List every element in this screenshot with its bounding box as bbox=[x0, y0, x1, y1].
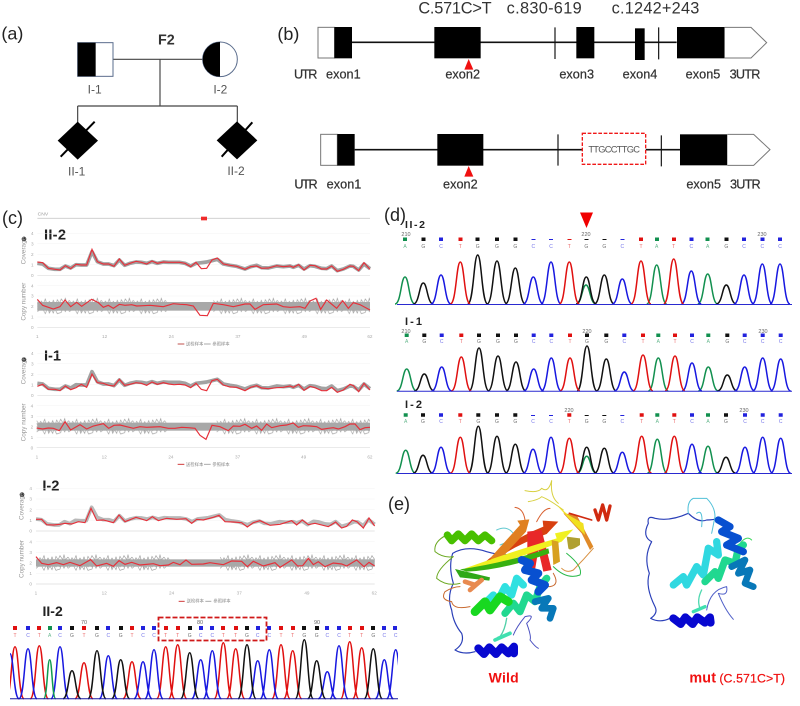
CNV track header bbox=[37, 211, 370, 220]
copy number trace II-2 bbox=[37, 296, 370, 316]
coverage axis I-1 bbox=[20, 351, 34, 398]
CNV chart: rest of I-1 and I-2: 24 bbox=[169, 590, 175, 595]
coverage axis I-1: 1 bbox=[31, 382, 34, 387]
mutant gene model bbox=[321, 133, 770, 177]
labels of pedigree members: II-1 bbox=[68, 165, 86, 179]
coverage axis I-2: Coverage bbox=[18, 492, 25, 520]
trace I-2: 220 bbox=[564, 408, 574, 414]
wild-type gene labels: 3UTR bbox=[730, 67, 760, 81]
wild-type gene labels: exon1 bbox=[326, 67, 361, 81]
base call letters: A bbox=[48, 633, 52, 639]
copy number axis I-1: 1 bbox=[31, 435, 34, 440]
copy number axis I-1: 3 bbox=[31, 414, 34, 419]
copy number axis I-1: 4 bbox=[31, 403, 34, 408]
legend I-2 bbox=[179, 598, 231, 605]
symbol: father I-1 carrier bbox=[78, 43, 113, 76]
mutant gene labels: 3UTR bbox=[730, 177, 761, 191]
label I-2: I-2 bbox=[42, 478, 59, 494]
trace II-2: II-2 bbox=[405, 219, 425, 231]
coverage trace I-1 bbox=[37, 372, 370, 392]
label II-2: II-2 bbox=[44, 227, 66, 243]
trace I-2: I-2 bbox=[405, 399, 422, 411]
coverage axis II-2: 1 bbox=[31, 262, 34, 267]
legend II-2: 参照样本 bbox=[212, 341, 230, 348]
mutant protein model bbox=[646, 498, 753, 624]
symbol: affected II-2 bbox=[217, 121, 257, 159]
copy number axis I-2 bbox=[18, 539, 32, 587]
copy number axis I-2: 0 bbox=[29, 582, 32, 587]
mutant gene labels: exon1 bbox=[327, 177, 361, 191]
position numbers: 70 bbox=[81, 620, 87, 626]
copy number axis II-2 bbox=[20, 283, 34, 330]
copy number axis I-2: 4 bbox=[29, 539, 32, 544]
position numbers: 90 bbox=[314, 620, 320, 626]
panel label d: (d) bbox=[384, 205, 406, 225]
CNV chart: rest of I-1 and I-2: 37 bbox=[235, 455, 241, 460]
CNV chart: II-2 and start of I-1: 62 bbox=[367, 334, 373, 339]
legend I-2: 送检样本 bbox=[187, 598, 205, 605]
CNV chart: rest of I-1 and I-2 bbox=[18, 403, 377, 605]
label II-2 sequence: II-2 bbox=[42, 603, 63, 619]
copy number trace I-1 bbox=[37, 417, 370, 439]
panel c bottom: Sanger trace showing insertion bbox=[0, 603, 418, 706]
coverage axis II-2: 4 bbox=[31, 231, 34, 236]
CNV chart: II-2 and start of I-1: 49 bbox=[302, 334, 307, 339]
CNV chart: rest of I-1 and I-2: 12 bbox=[102, 455, 107, 460]
CNV chart: rest of I-1 and I-2: 24 bbox=[168, 455, 174, 460]
CNV chart: II-2 and start of I-1: 37 bbox=[235, 334, 241, 339]
trace I-1 bbox=[397, 316, 792, 391]
mutant gene labels: UTR bbox=[294, 177, 318, 191]
beta sheet strands bbox=[482, 521, 558, 567]
wild-type gene labels: UTR bbox=[294, 67, 317, 81]
CNV chart: rest of I-1 and I-2: 49 bbox=[304, 590, 310, 595]
copy number axis II-2: Copy number bbox=[20, 283, 27, 321]
copy number axis I-2: 1 bbox=[29, 571, 32, 576]
coverage axis I-2: 2 bbox=[29, 507, 32, 512]
panel label b: (b) bbox=[277, 24, 299, 44]
coverage axis I-1: 0 bbox=[31, 393, 34, 398]
mutation arrowhead bbox=[580, 212, 593, 228]
mutant gene labels: exon5 bbox=[686, 177, 721, 191]
wild-type gene labels: exon2 bbox=[445, 67, 480, 81]
label Wild: Wild bbox=[489, 669, 519, 685]
copy number axis I-2: Copy number bbox=[18, 540, 25, 578]
coverage axis II-2: Coverage bbox=[20, 236, 27, 264]
coverage axis I-1: 4 bbox=[31, 351, 34, 356]
base call letters: CCCCCCCCCCCCC bbox=[26, 633, 398, 639]
wild-type gene labels: exon4 bbox=[623, 67, 657, 81]
coverage axis II-2: 2 bbox=[31, 252, 34, 257]
copy number axis II-2: 1 bbox=[31, 315, 34, 320]
coverage axis I-2: 1 bbox=[29, 518, 32, 523]
labels of pedigree members: I-1 bbox=[88, 82, 102, 96]
position numbers bbox=[81, 620, 320, 626]
panel label a: (a) bbox=[1, 23, 23, 43]
symbol: mother I-2 carrier bbox=[203, 42, 237, 77]
trace I-1: AAA bbox=[405, 339, 711, 345]
CNV chart: rest of I-1 and I-2: 62 bbox=[372, 590, 377, 595]
trace I-2 bbox=[396, 399, 792, 474]
coverage axis I-2 bbox=[18, 486, 32, 534]
coverage axis I-1: 2 bbox=[31, 372, 34, 377]
trace I-2: 230 bbox=[739, 408, 749, 414]
label mut (C.571C>T) bbox=[689, 670, 785, 686]
wild-type gene model bbox=[318, 27, 767, 70]
mutant gene labels: exon2 bbox=[443, 177, 478, 191]
CNV chart: II-2 and start of I-1: 24 bbox=[169, 334, 174, 339]
trace I-1: GGGGGGG bbox=[422, 339, 729, 345]
symbol: affected II-1 bbox=[58, 122, 98, 160]
copy number axis I-2: 2 bbox=[29, 561, 32, 566]
family label F2: F2 bbox=[158, 32, 175, 48]
trace I-1: 230 bbox=[758, 329, 768, 335]
copy number axis II-2: 3 bbox=[31, 294, 34, 299]
trace I-2: TTTT bbox=[459, 419, 676, 425]
wild-type gene labels: exon3 bbox=[559, 67, 594, 81]
legend I-1 bbox=[178, 461, 230, 468]
labels of pedigree members: II-2 bbox=[227, 164, 245, 178]
coverage axis I-2: 3 bbox=[29, 497, 32, 502]
CNV chart: rest of I-1 and I-2: 62 bbox=[367, 455, 373, 460]
panel a: pedigree bbox=[1, 23, 257, 179]
trace I-1: 210 bbox=[401, 329, 411, 335]
CNV chart: rest of I-1 and I-2: 49 bbox=[301, 455, 307, 460]
trace I-1: TTTT bbox=[460, 339, 677, 345]
chromatogram peaks bbox=[0, 635, 418, 706]
trace I-1: I-1 bbox=[405, 316, 422, 328]
copy number axis II-2: 4 bbox=[31, 283, 34, 288]
panel b: gene structure bbox=[277, 0, 770, 191]
trace I-1: 220 bbox=[582, 329, 592, 335]
base call letters: TTTTTTTTTTTT bbox=[13, 633, 363, 639]
copy number axis I-1: 2 bbox=[31, 424, 34, 429]
trace I-1: CCCCCCCC bbox=[440, 339, 783, 345]
trace II-2: 230 bbox=[757, 232, 767, 238]
trace I-2: AAA bbox=[404, 419, 710, 425]
helices bbox=[569, 513, 592, 520]
trace II-2: TTTT bbox=[459, 244, 675, 250]
coverage trace II-2 bbox=[37, 249, 370, 271]
labels of pedigree members: I-2 bbox=[213, 82, 228, 96]
copy number axis I-1 bbox=[20, 403, 34, 450]
CNV chart: II-2 and start of I-1: 12 bbox=[102, 334, 108, 339]
legend I-1: 送检样本 bbox=[186, 461, 204, 468]
legend I-1: 参照样本 bbox=[212, 461, 230, 468]
trace I-2: CCCCCCCC bbox=[439, 419, 783, 425]
trace II-2 bbox=[395, 219, 792, 304]
legend II-2: 送检样本 bbox=[186, 341, 204, 348]
trace II-2: AAA bbox=[403, 244, 710, 250]
coverage axis I-2: 4 bbox=[29, 486, 32, 491]
x axis ticks I-1: 1 bbox=[36, 455, 39, 460]
copy number trace I-2 bbox=[36, 553, 375, 573]
coverage axis II-2: 3 bbox=[31, 241, 34, 246]
panel label e: (e) bbox=[388, 494, 410, 514]
trace II-2: CCCCCCCC bbox=[439, 244, 782, 250]
base call markers bbox=[13, 626, 397, 630]
coverage axis I-1: 3 bbox=[31, 361, 34, 366]
CNV chart: rest of I-1 and I-2: 37 bbox=[237, 590, 242, 595]
trace II-2: GGGGGGG bbox=[421, 244, 728, 250]
trace II-2: 220 bbox=[581, 232, 591, 238]
wild-type gene labels bbox=[294, 67, 760, 81]
copy number axis I-2: 3 bbox=[29, 550, 32, 555]
panel label c: (c) bbox=[2, 208, 23, 228]
coverage axis II-2: 0 bbox=[31, 273, 34, 278]
label I-1: I-1 bbox=[44, 349, 61, 365]
trace II-2: 210 bbox=[401, 232, 411, 238]
copy number axis I-1: Copy number bbox=[20, 403, 27, 441]
CNV chart: II-2 and start of I-1 bbox=[20, 211, 373, 398]
x axis ticks I-2: 1 bbox=[35, 590, 38, 595]
label mut (C.571C>T): (C.571C>T) bbox=[719, 671, 785, 685]
trace I-2: GGGGGGG bbox=[421, 419, 728, 425]
coverage axis I-2: 0 bbox=[29, 529, 32, 534]
labels of pedigree members bbox=[68, 82, 245, 179]
dashed red box over inserted bases bbox=[158, 618, 266, 640]
panel d: Sanger traces for family bbox=[384, 205, 792, 474]
x axis ticks II-2: 1 bbox=[36, 334, 39, 339]
panel c: CNV plots bbox=[2, 208, 377, 605]
wild-type protein model bbox=[435, 481, 610, 654]
CNV chart: rest of I-1 and I-2: 12 bbox=[102, 590, 107, 595]
label mut (C.571C>T): mut bbox=[689, 670, 716, 686]
panel e: protein structures bbox=[388, 481, 785, 686]
coverage axis I-1: Coverage bbox=[20, 356, 27, 384]
coverage trace I-2 bbox=[36, 507, 375, 528]
legend I-2: 参照样本 bbox=[213, 598, 231, 605]
base call letters: GGGGGGGG bbox=[70, 633, 375, 639]
variant labels bbox=[418, 0, 699, 17]
CNV track header: CNV bbox=[38, 211, 49, 217]
coverage axis II-2 bbox=[20, 231, 34, 278]
copy number axis II-2: 2 bbox=[31, 304, 34, 309]
mutant gene labels bbox=[294, 177, 761, 191]
position numbers: 80 bbox=[197, 620, 203, 626]
copy number axis I-1: 0 bbox=[31, 445, 34, 450]
pedigree connecting lines bbox=[78, 59, 237, 124]
mutant gene model: TTGCCTTGC bbox=[588, 145, 640, 155]
legend II-2 bbox=[178, 341, 230, 348]
copy number axis II-2: 0 bbox=[31, 325, 34, 330]
wild-type gene labels: exon5 bbox=[686, 67, 720, 81]
